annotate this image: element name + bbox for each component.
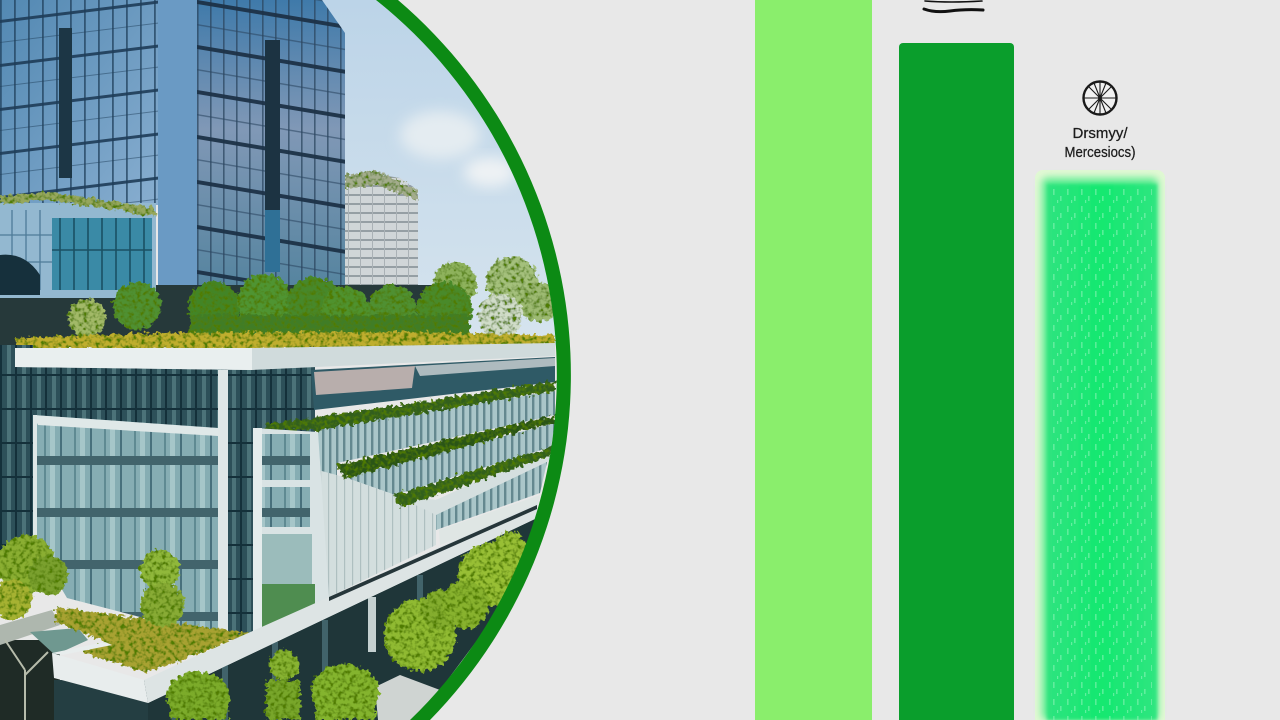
bar: neon green with glow <box>1035 170 1165 720</box>
label line 2: Mercesiocs) <box>1064 145 1136 161</box>
panel: building photo in circular crop <box>0 0 570 720</box>
icon: water ripple above dark bar <box>924 1 983 12</box>
base shadow behind tree row <box>0 285 450 347</box>
terrace louvres and planters <box>265 381 555 597</box>
main glass tower, central pillar <box>158 0 197 292</box>
label line 1: Drsmyy/ <box>1072 126 1128 142</box>
front-right glazed panel <box>253 428 329 627</box>
rooftop tree row <box>68 256 558 338</box>
bar: light green <box>755 0 872 720</box>
bare sapling <box>5 640 48 720</box>
green circular arc border <box>376 0 571 720</box>
rooftop garden <box>0 607 252 720</box>
courtyard trees <box>0 532 526 720</box>
sky with clouds <box>322 0 556 345</box>
label above neon bar <box>1064 126 1136 161</box>
main glass tower, right face <box>197 0 345 288</box>
white beam and ledge <box>52 503 537 703</box>
underside of building <box>148 518 537 720</box>
bar: dark green <box>899 43 1014 720</box>
yellow-green roof hedge <box>15 332 555 350</box>
main glass tower, left face <box>0 0 158 205</box>
left podium building <box>0 192 156 298</box>
lower building dark glass <box>0 345 555 565</box>
icon: dial wheel <box>1084 82 1116 114</box>
distant grey tower <box>345 170 418 295</box>
front glass box <box>33 370 253 640</box>
white roof slab <box>15 343 555 370</box>
